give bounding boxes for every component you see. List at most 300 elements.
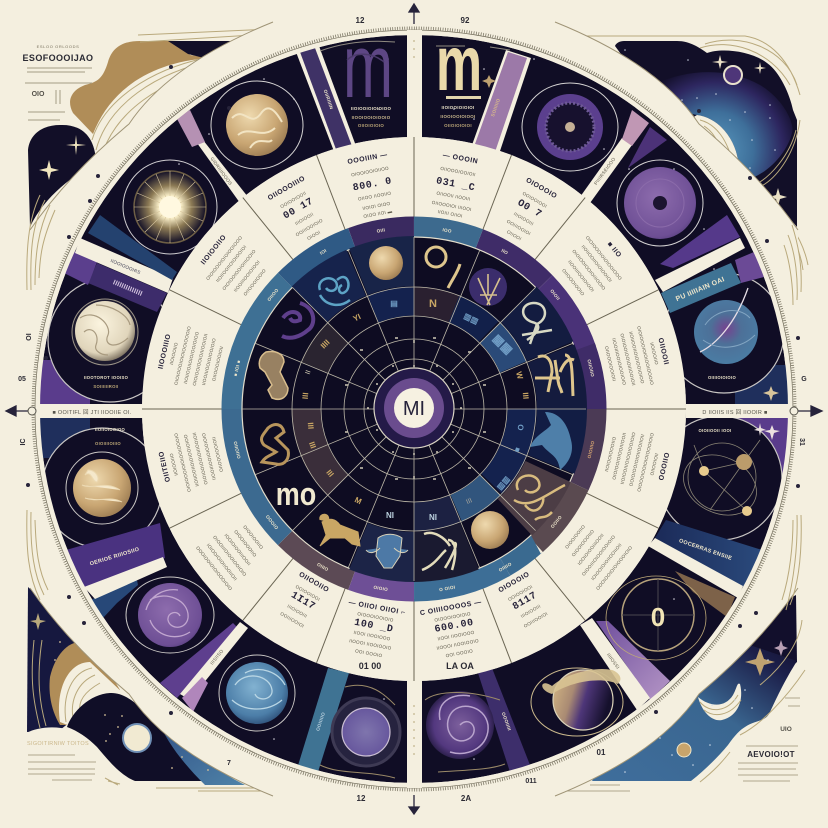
- left strip text: ■ OOITIFL 回 JTI IIOOIIE OI.: [52, 409, 132, 416]
- corner art: bottom left: [27, 587, 265, 791]
- caption: IIOIOOIOIOIOIOO: [351, 106, 391, 111]
- data block: -77 degrees: [155, 321, 227, 394]
- caption: purple m third line: OIIOIOIOIO: [358, 123, 384, 128]
- data block: 169 degrees: IIOOOI IIOOIOOIO: [436, 638, 479, 651]
- strip labels: OOCERRAS ENSIIE: [678, 538, 733, 562]
- data block: 10 degrees: — OOOIN: [442, 152, 479, 165]
- strip: blue 302 degrees: [88, 215, 177, 280]
- strip: cream 120 degrees: [648, 538, 743, 598]
- colored band labels: ■ IOI ■: [233, 360, 241, 377]
- inner gold and blue cell labels: O: [515, 424, 525, 431]
- data block: -77 degrees: IIOOIIIOOIOIOOIOIO: [201, 337, 217, 386]
- data block: 103 degrees: OIIOOO: [656, 452, 670, 481]
- caption: UIO: [780, 726, 792, 733]
- data block: -30 degrees: IIIOIOOII: [294, 212, 314, 226]
- data block: -51 degrees: IIOOIIIOOIOIOOI: [233, 259, 261, 293]
- data block: 10 degrees: 031 _C: [435, 176, 476, 194]
- caption: OIOIIOOII IOOI: [698, 428, 732, 433]
- inner gold and blue cell labels: III: [465, 497, 474, 506]
- left strip: [36, 404, 144, 418]
- zodiac: gold m: [436, 21, 510, 110]
- data block: -103 degrees: OIIOOOIOOIOII: [211, 436, 224, 472]
- data block: 103 degrees: IIOIIOOIIOIOIOOIOIOO: [628, 434, 645, 487]
- colored band labels: OIOII: [549, 288, 561, 301]
- central dark disc: [242, 237, 586, 581]
- data block: 10 degrees: OIIOOII IIOOIII: [436, 191, 471, 202]
- data block: -10 degrees: OIIOO IIOOIIO: [358, 191, 392, 202]
- strip: lilac cap 38 degrees: [622, 110, 649, 146]
- data block: 150 degrees: OIOOOIO: [498, 571, 531, 594]
- colored strips in the dark ring: [62, 46, 764, 772]
- dark sky: [615, 41, 797, 227]
- dark blue swirl: [27, 587, 110, 732]
- data block: -10 degrees: IIOIOI OIOO: [362, 201, 391, 211]
- data block: 190 degrees: OIOOOIOOIOIO: [357, 611, 394, 623]
- nebula stars: [625, 650, 768, 772]
- bottom left label: 7: [227, 760, 231, 767]
- data block: 128 degrees: OIIOOOIOOIO: [570, 529, 595, 558]
- strip: purple cap 67 degrees: [735, 252, 764, 283]
- vertical cream strips: [407, 30, 422, 788]
- strip: brown 123 degrees: [675, 571, 735, 617]
- center label: MI: [403, 398, 425, 420]
- strip labels: OERIOE RIIIOSIIO: [89, 547, 141, 567]
- data block: 51 degrees: IIOIIOOIIOIOIOOIOI: [581, 244, 613, 283]
- tinted sector cells: [205, 200, 623, 618]
- galaxy swirl: [425, 691, 505, 772]
- constellation: [674, 428, 766, 526]
- caption lines: IIOIIOIOOIOO: [95, 427, 126, 432]
- data block: -51 degrees: IIOIOOIIO: [200, 234, 228, 266]
- planet: blue with purple streak: [694, 288, 758, 380]
- data block: 190 degrees: — OIIOI OIIOI ⌐: [348, 599, 406, 617]
- dark outer sector ring: [91, 86, 737, 732]
- caption: cream planet second line: SOIIIIIIROII: [93, 384, 119, 389]
- data block: -128 degrees: OIIOOOIOOIO: [233, 529, 258, 558]
- gold scroll glyph: [514, 475, 565, 520]
- data block: 210 degrees: OOIIIOOIOI: [279, 611, 305, 629]
- strip: dark purple 164 degrees: [478, 668, 530, 772]
- strip: cream 141 degrees: [580, 618, 650, 710]
- data block: -128 degrees: OIOIOOIOOIOIIIOOIO: [212, 534, 247, 577]
- outer swoosh side lines: [27, 195, 801, 610]
- strip: dark purple 293 degrees: [88, 263, 167, 312]
- data block: 77 degrees: IIOOIIIOOIOIOOIOIO: [611, 338, 627, 386]
- inner gold and blue cell labels: [301, 298, 530, 522]
- star icon: [30, 613, 46, 630]
- inner gold and blue cell labels: YI: [352, 312, 362, 323]
- heading overline: ESLOO ORLOODS: [37, 44, 79, 49]
- top right label: 92: [461, 16, 470, 25]
- strip: navy 116 degrees: [655, 520, 762, 588]
- planet: purple dial: [522, 83, 618, 171]
- data block: 150 degrees: OOIIIOOIOI: [523, 611, 549, 629]
- dark star blob: [28, 125, 96, 227]
- planet: radiant sun: [123, 160, 217, 254]
- bottom label: 011: [525, 778, 537, 785]
- colored band labels: OIIIOIO: [586, 441, 595, 459]
- star field: [64, 57, 764, 759]
- data block: 150 degrees: OOIOOIOOI: [507, 584, 533, 602]
- corner art: bottom right: [561, 595, 805, 791]
- colored band labels: OIIOIIO: [233, 440, 242, 459]
- data block: -77 degrees: IIOIOOIIO: [169, 342, 179, 365]
- center medallion: [374, 368, 454, 448]
- data block: 77 degrees: OIOIOOOIOIOIOOIOOOIO: [636, 326, 655, 386]
- data block: 150 degrees: 8117: [511, 590, 539, 613]
- right strip text: D IIOIIS IIS 回 IIOOIR ■: [702, 409, 768, 416]
- data block: -51 degrees: OIOIOOOIOIOIOOIOOO: [205, 235, 243, 281]
- strip labels: [89, 89, 733, 732]
- gold stars: [55, 642, 208, 770]
- bottom rule lines: [105, 778, 265, 791]
- data block: 103 degrees: IIOIOOIIO: [649, 453, 659, 476]
- strip labels: GIDRIIIIOOOS: [209, 156, 233, 186]
- data block: 77 degrees: IIOIOOIIO: [649, 342, 659, 365]
- strip: purple wedge 42 degrees: [628, 127, 667, 168]
- zodiac: gold m: m: [436, 21, 482, 108]
- rule lines: [25, 68, 92, 120]
- planet: gold marbled: [211, 81, 303, 169]
- data block: -30 degrees: OIIOOOIIIO: [267, 175, 307, 202]
- data block: 210 degrees: OIIOOIIO: [297, 571, 330, 594]
- strip: purple 220 degrees: [160, 623, 240, 698]
- data block: -51 degrees: IIOIIOOIIOIOIOOIOI: [215, 244, 247, 283]
- star icons: [39, 135, 86, 180]
- caption: gold m second line: IIOOIOOIOIOOI: [440, 114, 476, 119]
- colored band labels: OIII: [376, 227, 386, 234]
- data block: 30 degrees: OOIIIOOIOI: [506, 219, 532, 236]
- data block: -10 degrees: OOOIIIN —: [347, 152, 388, 166]
- data block: 30 degrees: OIOOOIO: [525, 177, 558, 200]
- left lower label: IC: [20, 438, 27, 446]
- gold creature: [259, 351, 288, 399]
- data block: -128 degrees: [195, 514, 272, 591]
- strip labels: PU IIIIIAIN OAI: [675, 276, 726, 303]
- cream data ring: [142, 137, 686, 681]
- dark cloud with moon: [67, 693, 205, 781]
- data block: -10 degrees: OIOOIOOIOIIOO: [351, 166, 389, 177]
- inner gold and blue cell labels: III: [306, 422, 315, 429]
- right lower label: 31: [798, 438, 805, 446]
- blue bull: [366, 534, 408, 568]
- inner gold and blue cell labels: ▥▥: [496, 475, 512, 492]
- data block: -128 degrees: IIOIIOOIIOIOIOOIOI: [206, 542, 238, 581]
- colored band labels: IIO: [500, 248, 509, 256]
- data block: 169 degrees: C OIIIIOOOOS —: [419, 599, 482, 617]
- top arrow: [409, 4, 419, 24]
- left arrow: [6, 406, 28, 416]
- ringed gold planet: [531, 668, 623, 736]
- inner gold and blue cell labels: III: [324, 468, 336, 479]
- inner gold and blue cell labels: III: [521, 392, 530, 399]
- data block: -103 degrees: IIOOIIIOOIOIOOIOIO: [201, 432, 217, 480]
- data block: -10 degrees: [347, 152, 398, 220]
- data block: -30 degrees: 00 17: [282, 196, 316, 222]
- dark sky upper: [690, 595, 797, 710]
- data block: 103 degrees: IIOOIIIOOIOIOOIOIO: [611, 432, 627, 481]
- colored band labels: IOI: [319, 248, 328, 256]
- data block: 150 degrees: IIIOIOOIII: [520, 604, 542, 619]
- strip: cream 38 degrees: [580, 138, 632, 203]
- data block: 51 degrees: OIOIOOOIOIOIOOIOOO: [585, 235, 623, 281]
- strip: cream 62 degrees: [655, 238, 745, 292]
- horizontal cream strips: [36, 404, 790, 418]
- inner gold and blue cell labels: N: [429, 298, 437, 310]
- strip labels: IIIIOSSI: [606, 652, 621, 670]
- left ring node: [28, 407, 36, 415]
- data block: -128 degrees: OIIOOIOOIO: [242, 524, 264, 550]
- medallion cream core: [394, 388, 434, 428]
- data block: 128 degrees: IIOIIOOIIOIOIOOIOI: [590, 542, 622, 581]
- strip: lilac, upper right: [472, 50, 531, 154]
- blue nebula: [592, 640, 797, 781]
- vertical strip marks: [413, 40, 415, 760]
- inner gold and blue cell labels: III: [301, 392, 310, 399]
- colored band labels: [233, 227, 595, 592]
- data block: 10 degrees: [430, 152, 481, 220]
- inner gold and blue cell labels: NI: [429, 513, 437, 522]
- inner gold and blue cell labels: II: [305, 369, 313, 376]
- data block: 190 degrees: IIOOOI IIOOIOOIO: [349, 638, 392, 651]
- colored band labels: OIOOO: [265, 514, 279, 530]
- strip: lilac 139 degrees: [596, 621, 670, 700]
- star: gold near m: [482, 75, 496, 88]
- data block: 190 degrees: IIOOI IIOOIOOO: [353, 630, 391, 642]
- lower right labels: 01: [597, 748, 606, 757]
- colored band labels: OIIOO: [549, 515, 563, 529]
- data block: 210 degrees: OOIOOIOOI: [295, 584, 321, 602]
- data block: 10 degrees: OIIOOOIOOIOII: [440, 166, 476, 177]
- data block: -103 degrees: OIITEIIO: [158, 450, 172, 483]
- strip labels: SOIIIIIO: [490, 98, 501, 117]
- data block: -77 degrees: IIOOOIIIO: [158, 333, 173, 370]
- heading: ESOFOOOIJAO: [23, 53, 93, 63]
- caption: gold m third line: OIIOIOIOIOI: [444, 123, 472, 128]
- gold star: [745, 648, 775, 676]
- strip labels: IIOOIOOOIRS: [110, 258, 141, 275]
- data block: -77 degrees: OIOIOOOIOIOIOOIOOOIO: [173, 325, 192, 386]
- data block: -77 degrees: OIOIOOIOOIOIIIOOIOII: [192, 333, 209, 386]
- arc lines: [32, 640, 100, 728]
- cream m glyph: mo: [276, 477, 316, 513]
- strip: cream 322 degrees: [197, 140, 248, 203]
- panel heading: SIGOITIRNIW TOITOS: [27, 741, 89, 747]
- lower cream text panel: [27, 727, 130, 782]
- data block: 128 degrees: OIOIOOIOOIOIIIOOIO: [581, 534, 616, 577]
- panel text lines: [28, 755, 96, 780]
- data block: 128 degrees: OIIOOIOOIO: [564, 524, 586, 550]
- data block: 77 degrees: OIIOOII: [656, 337, 669, 366]
- glowing sun: [677, 743, 691, 757]
- caption: OIIIIOIOIOIO: [708, 375, 736, 380]
- strip labels: PIIIIRSEIOOO: [593, 156, 616, 186]
- strip: purple cap 293 degrees: [62, 250, 97, 285]
- gold circle glyph: [426, 247, 460, 288]
- data block: -103 degrees: [155, 424, 227, 497]
- inner gold and blue cell labels: ■: [512, 446, 522, 454]
- data block: 51 degrees: IIOOIIIOOIOIOOI: [567, 259, 595, 293]
- inner gold and blue cell labels: NI: [386, 511, 394, 520]
- data block: 51 degrees: ■ IIO: [606, 241, 622, 259]
- radial grid: [242, 237, 586, 581]
- data block: 190 degrees: 100 _D: [353, 618, 394, 636]
- data block: -103 degrees: OIOIOOIOOIOIIIOOIOII: [192, 432, 209, 485]
- ringed planet: [724, 66, 742, 84]
- data block: -30 degrees: OOIOOIOOII: [279, 190, 307, 209]
- data block: 30 degrees: OOIOOIOOI: [522, 191, 548, 209]
- blue animal: [530, 412, 572, 470]
- data block: -77 degrees: OIIOOOIOOIOII: [211, 346, 224, 382]
- data block: -51 degrees: OIOIOOIOOIOIIIOOIO: [221, 248, 257, 291]
- mini gold planet: [369, 246, 403, 280]
- data block: -30 degrees: OIOOI: [306, 230, 321, 241]
- data block: 51 degrees: OIOIOOIOOIOIIIOOIO: [571, 249, 607, 291]
- colored band labels: OIIOIIO: [586, 359, 595, 378]
- medallion purple ring: [384, 378, 444, 438]
- planet: lavender: [320, 685, 400, 778]
- planet: blue swirl: [219, 655, 295, 731]
- strip labels: IIISIISO: [209, 648, 224, 666]
- data block: -128 degrees: OIOIOOOIOIOIOOIOOO: [195, 545, 233, 591]
- gold seahorse: [261, 425, 288, 464]
- corner art: top right: [583, 36, 808, 270]
- data block: 169 degrees: OIOOOIOOIOIO: [434, 611, 471, 623]
- strip: purple 243 degrees: [66, 523, 165, 590]
- data block: 128 degrees: OIOIOOOIOIOIOOIOOO: [595, 545, 633, 591]
- strip labels: IIIIIIIIIIIIII: [112, 279, 143, 298]
- right labels: G: [801, 376, 807, 383]
- strip labels: OOOIIIII: [501, 711, 512, 732]
- data block: 190 degrees: OOI OOOIO: [355, 648, 383, 658]
- caption: purple m second line: IIOOIOOIOIOOIO: [352, 115, 391, 120]
- strip: blue 67 degrees: [661, 263, 741, 313]
- inner gold and blue cell labels: III: [307, 440, 318, 450]
- star: gold, right: [763, 386, 779, 401]
- inner gold and blue cell labels: ▦▦: [490, 331, 516, 357]
- data block: -51 degrees: OIIOOOIOOIO: [243, 268, 267, 297]
- strip: cream 297 degrees: [75, 238, 173, 293]
- ring divider lines: [142, 137, 686, 681]
- colored band labels: IOO: [442, 227, 452, 234]
- data block: 169 degrees: OOI OOOIO: [445, 648, 473, 658]
- left upper label: OI: [26, 333, 33, 341]
- glyph seal: letter O: 0: [651, 602, 665, 632]
- data block: 77 degrees: OIIOOOIOOIOII: [604, 346, 617, 382]
- dark sky sliver: [168, 41, 238, 60]
- data block: -103 degrees: OIOIOOOIOIOIOOIOOOIO: [173, 432, 192, 492]
- inner gold and blue cell labels: M: [353, 495, 363, 506]
- right bottom sector label: LA OA: [446, 661, 474, 671]
- bottom arrow: [409, 795, 419, 814]
- data block: 30 degrees: IIIOIOOIII: [513, 211, 535, 227]
- star: lilac pair: [754, 423, 780, 440]
- data block: 103 degrees: OIOIOOIOOIOIIIOOIOII: [619, 432, 636, 485]
- glyph seal: letter O: [606, 576, 706, 660]
- strip: blue 237 degrees: [90, 580, 138, 618]
- scale markers: [28, 67, 798, 713]
- cream crescent moon: [698, 684, 741, 720]
- data block: 10 degrees: OIIOOOIOI IIIOOI: [431, 200, 472, 212]
- blue water: [155, 715, 245, 785]
- data block: -103 degrees: IIOIOOIIO: [169, 453, 179, 476]
- strip: dark purple, upper left: [296, 46, 356, 154]
- data block: 51 degrees: [554, 226, 634, 306]
- colored band labels: OIIIIO: [498, 561, 513, 573]
- bottom sector labels: [359, 661, 474, 671]
- bottom left label: 12: [357, 794, 366, 803]
- planet: big purple disc: [617, 160, 703, 246]
- colored band labels: O OIOI: [439, 584, 456, 592]
- innermost ring ticks: [345, 338, 486, 479]
- data block: 30 degrees: OIIOOI: [506, 229, 522, 242]
- data block: 128 degrees: [556, 514, 633, 591]
- strip: cream 216 degrees: [180, 622, 248, 700]
- data block: 128 degrees: IIOOIIIOOIOIOOI: [576, 533, 605, 566]
- medallion dark ring: [374, 368, 454, 448]
- planet: gold sandy: [66, 427, 138, 524]
- cream arcs: [59, 662, 125, 728]
- data block: 210 degrees: 1I17: [289, 590, 317, 613]
- strip labels: OOIIIIIO: [315, 711, 326, 732]
- purple swirl glyph: [282, 303, 313, 338]
- data block: 169 degrees: IIOOI IIOOIOOO: [437, 630, 475, 642]
- zodiac glyphs: [259, 246, 574, 570]
- colored band ring: [157, 152, 671, 666]
- nebula stars: [625, 50, 775, 168]
- inner gold and blue cell labels: ▤: [390, 299, 398, 308]
- data block: 10 degrees: IIOIII OIIOI: [437, 209, 463, 219]
- data block: 103 degrees: OIOIOOOIOIOIOOIOOOIO: [636, 432, 655, 493]
- blue crab glyph: [319, 277, 350, 305]
- colored band labels: OIIIO: [316, 562, 330, 572]
- right ring node: [790, 407, 798, 415]
- gold goat: [320, 514, 360, 546]
- purple starburst with V: [469, 268, 507, 306]
- data block: 30 degrees: O0 7: [515, 198, 543, 221]
- star icons: [712, 55, 787, 206]
- data block: -51 degrees: [194, 226, 274, 305]
- crescent lines: [583, 36, 808, 270]
- data block: 77 degrees: OIOIOOIOOIOIIIOOIOII: [619, 333, 636, 386]
- cream omega glyph: [522, 303, 552, 344]
- data block: 210 degrees: IIIOIOOIII: [286, 604, 308, 619]
- data block: 150 degrees: [498, 571, 552, 631]
- inner gold and blue cell labels: IIII: [319, 338, 332, 351]
- caption: IIOIOOIOIOIOI: [442, 105, 474, 110]
- gold nebula: [70, 41, 210, 134]
- data block: 103 degrees: [601, 424, 673, 497]
- inner gold and blue cell labels: ▥▥: [462, 311, 480, 326]
- data block: 77 degrees: [601, 321, 673, 394]
- data block: 169 degrees: 600.00: [434, 618, 475, 636]
- right strip: [686, 404, 790, 418]
- data block: -10 degrees: 800. 0: [352, 176, 393, 194]
- strip: blue 196 degrees: [296, 668, 349, 772]
- data block: 190 degrees: [340, 599, 406, 661]
- zodiac: purple m: m: [343, 17, 393, 117]
- cream crescent swoosh: [680, 115, 760, 192]
- colored band labels: OIIOO: [266, 287, 280, 302]
- data block: -30 degrees: OOIIIOOIOIO: [295, 218, 324, 237]
- moon: [123, 724, 151, 752]
- data block: 210 degrees: [276, 571, 330, 630]
- bottom sector labels: 01 00: [359, 661, 381, 671]
- caption: OIO: [32, 91, 45, 98]
- swoosh lines: [92, 29, 273, 165]
- planet: cream swirl: [72, 299, 138, 380]
- data block: -128 degrees: IIOOIIIOOIOIOOI: [223, 533, 252, 566]
